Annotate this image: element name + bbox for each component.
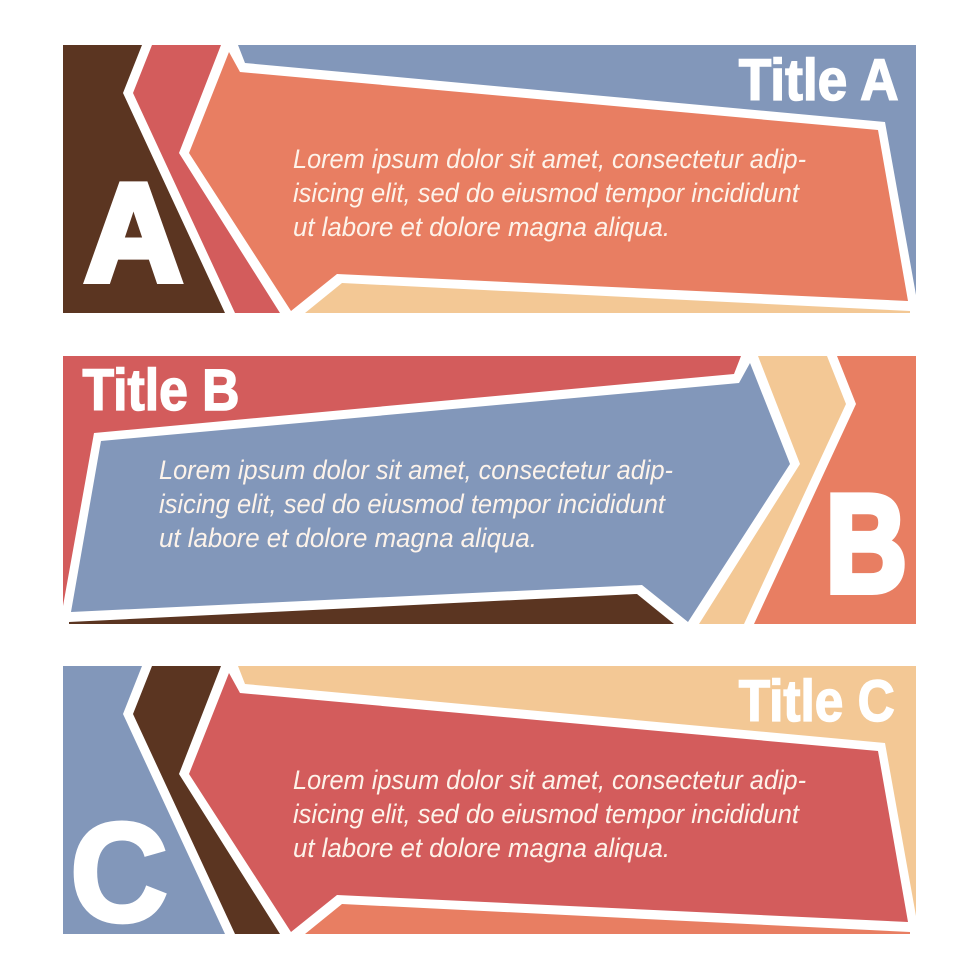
heading: Title C: Title C	[739, 669, 895, 734]
body text C: Lorem ipsum dolor sit amet, consectetur adip-	[293, 765, 806, 795]
body text A	[293, 144, 806, 242]
body text A: ut labore et dolore magna aliqua.	[293, 212, 670, 242]
panel: banner A	[63, 45, 916, 313]
body text C: isicing elit, sed do eiusmod tempor incididunt	[293, 799, 800, 829]
chevron band: brown	[133, 666, 280, 934]
body text A: Lorem ipsum dolor sit amet, consectetur adip-	[293, 144, 806, 174]
panel: banner C	[63, 666, 916, 951]
big letter B: B	[826, 466, 907, 622]
body text B	[159, 455, 673, 553]
panel: banner B	[63, 356, 916, 624]
top-right band: blue	[238, 45, 916, 295]
body text A: isicing elit, sed do eiusmod tempor incididunt	[293, 178, 800, 208]
left band: blue	[63, 666, 225, 934]
left band: brown	[63, 45, 225, 313]
body text C	[293, 765, 806, 863]
big letter A: A	[84, 156, 182, 310]
main arrow panel: red	[189, 673, 908, 932]
top-left band: red	[63, 356, 741, 606]
bottom band: brown	[69, 594, 674, 624]
chevron band: red	[133, 45, 280, 313]
body text B: Lorem ipsum dolor sit amet, consectetur adip-	[159, 455, 673, 485]
heading: Title B: Title B	[82, 358, 240, 423]
body text B: ut labore et dolore magna aliqua.	[159, 523, 537, 553]
body text C: ut labore et dolore magna aliqua.	[293, 833, 670, 863]
heading: Title A: Title A	[739, 48, 899, 113]
top-right band: cream	[238, 666, 916, 916]
bottom band: orange	[305, 904, 910, 934]
big letter C: C	[70, 793, 168, 951]
chevron band: cream	[699, 356, 846, 624]
right band: orange	[754, 356, 916, 624]
main arrow panel: blue	[71, 363, 790, 622]
bottom band: cream	[305, 283, 910, 313]
main arrow panel: orange	[189, 52, 908, 311]
body text B: isicing elit, sed do eiusmod tempor incididunt	[159, 489, 666, 519]
